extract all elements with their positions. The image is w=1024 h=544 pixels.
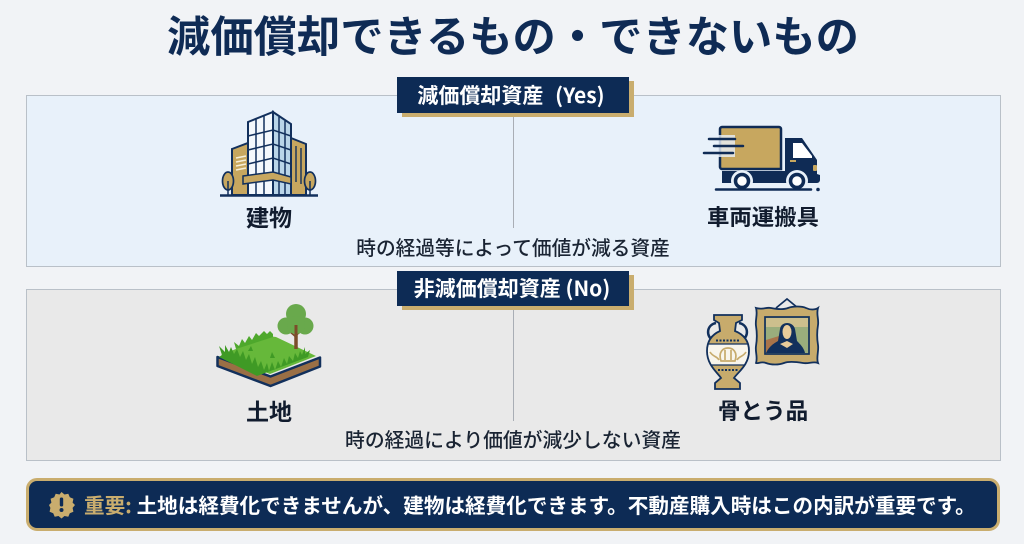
badge: depreciable assets: 減価償却資産 (Yes): [417, 80, 605, 110]
panel: non-depreciable assets: [26, 271, 1001, 461]
label: vehicles: 車両運搬具: [707, 200, 819, 232]
label: building: 建物: [246, 199, 292, 233]
label: land: 土地: [246, 393, 292, 427]
title: 減価償却できるもの・できないもの: [167, 3, 859, 65]
label: antiques: 骨とう品: [718, 393, 808, 426]
panel background: [26, 95, 1001, 267]
panel: depreciable assets: [26, 77, 1001, 267]
center divider: [513, 306, 514, 421]
note text: 重要: 土地は経費化できませんが、建物は経費化できます。不動産購入時はこの内訳が重要です。: [84, 489, 976, 519]
callout: important note: [26, 478, 1000, 531]
icon: land with tree: [216, 304, 322, 388]
description: depreciable: 時の経過等によって価値が減る資産: [356, 232, 670, 261]
icon: antiques: [706, 298, 820, 390]
panel background: [26, 289, 1001, 461]
icon: warning badge: [49, 492, 75, 518]
icon: building: [220, 110, 318, 197]
icon: truck: [702, 126, 820, 192]
vase and painting: [705, 299, 818, 389]
badge: depreciable assets: [397, 77, 629, 113]
center divider: [513, 113, 514, 228]
badge: non-depreciable assets: 非減価償却資産 (No): [414, 273, 610, 303]
description: non-depreciable: 時の経過により価値が減少しない資産: [345, 424, 681, 453]
